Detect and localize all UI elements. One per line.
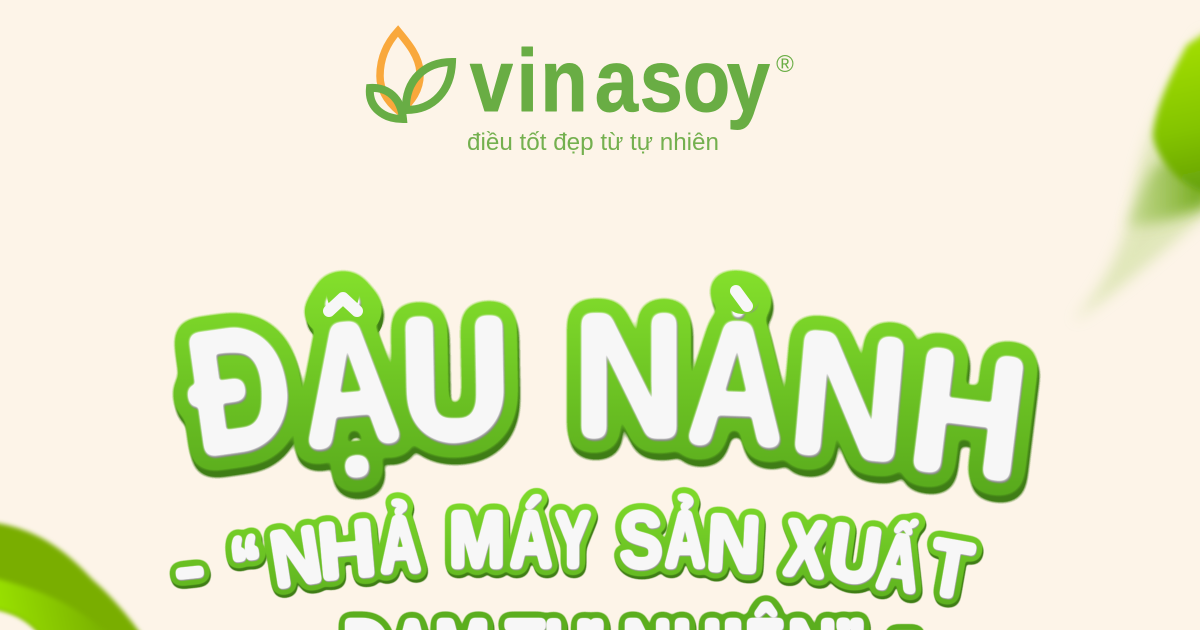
diacritic: mark on Ả	[724, 278, 760, 314]
heading: lines 2-3 white letters: X	[781, 503, 830, 596]
heading: lines 2-3 white letters: H	[314, 503, 379, 596]
heading: line 1 white letters: U	[398, 280, 512, 477]
heading: line 1 extrusion	[174, 290, 1041, 504]
icon: orange flame leaf	[380, 31, 420, 112]
diacritic: circumflex on Ậ	[327, 280, 359, 312]
heading: lines 2-3 white letters: Á	[510, 495, 552, 584]
heading: line 1 green outline	[172, 269, 1039, 496]
heading: lines 2-3 white letters: M	[449, 494, 505, 584]
heading: lines 2-3 white letters: N	[705, 498, 762, 590]
heading: lines 2-3 white letters: T	[923, 521, 979, 617]
heading: lines 2-3 extrusion	[170, 494, 984, 630]
heading: line 1 white letters: Ả	[683, 284, 789, 484]
heading: lines 2-3 white letters: Ả	[378, 498, 422, 590]
heading: line 1 white letters: N	[574, 278, 684, 473]
heading: lines 2-3 white letters: “	[225, 518, 269, 611]
icon: right green leaf	[406, 62, 452, 110]
logo: vinasoy	[370, 31, 794, 156]
heading: line 1 white letters: Đ	[176, 286, 303, 493]
heading: lines 2-3 white letters: Y	[555, 495, 591, 585]
icon: left green leaf	[370, 88, 403, 119]
heading: lines 2-3 white letters: Ả	[665, 494, 705, 584]
heading: lines 2-3 white letters	[171, 494, 979, 630]
registered mark: ®	[776, 51, 794, 78]
heading: lines 2-3 white letters: U	[823, 506, 886, 601]
leaf: top right blurred	[1073, 30, 1200, 322]
tagline: điều tốt đẹp từ tự nhiên	[467, 129, 719, 156]
leaf: bottom left blurred	[0, 522, 145, 630]
heading: line 1 white letters: H	[900, 311, 1037, 518]
heading: lines 2-3 white letters: N	[264, 509, 327, 605]
heading: lines 2-3 white letters: Ấ	[873, 515, 925, 610]
heading: lines 2-3 white letters: –	[171, 520, 207, 612]
heading: line 1 white letters	[176, 278, 1037, 518]
heading: lines 2-3 green outline	[169, 486, 983, 630]
title: Đậu nành - nhà máy sản xuất đạm tự nhiên	[169, 269, 1041, 630]
brand name: vinasoy	[470, 31, 770, 130]
heading: line 1 white letters: N	[783, 293, 916, 498]
heading: line 1 white letters: Ậ	[292, 282, 407, 486]
heading: lines 2-3 white letters: S	[620, 495, 662, 585]
